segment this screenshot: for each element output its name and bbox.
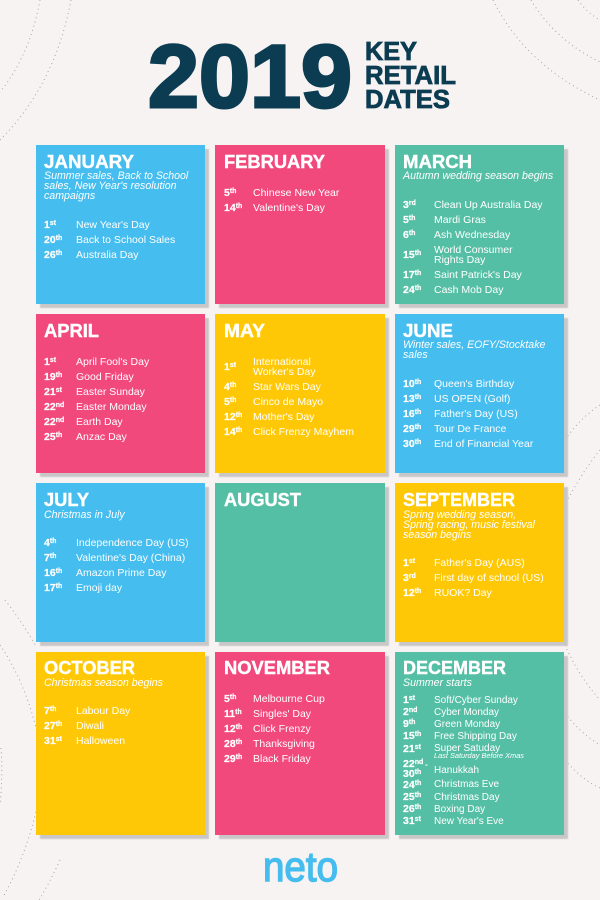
dates: February [224, 187, 340, 214]
panel: August [215, 483, 389, 646]
dates: April: Anzac Day [76, 431, 128, 443]
dates: July: th [50, 553, 56, 560]
panel: June [395, 314, 568, 477]
dates: December: 15 [403, 730, 415, 742]
subtitle: June: sales [403, 349, 428, 361]
dates: November: 5 [224, 693, 230, 705]
dates: June: 13 [403, 393, 415, 405]
dates: January: 1 [44, 219, 50, 231]
dates: January: th [56, 235, 62, 242]
dates: May: th [230, 382, 236, 389]
dates: May: 5 [224, 396, 230, 408]
dates: November: 28 [224, 738, 236, 750]
subtitle: September: season begins [403, 529, 472, 541]
dates: November: Thanksgiving [253, 738, 315, 750]
dates: December: th [415, 731, 421, 738]
dates: September: 12 [403, 587, 415, 599]
panel: December [395, 652, 568, 839]
dates: October: 31 [44, 735, 56, 747]
dates: June: 29 [403, 423, 415, 435]
dates: September: 3 [403, 572, 409, 584]
dates: October: th [56, 721, 62, 728]
dates: December: Soft/Cyber Sunday [434, 695, 518, 706]
dates: May: th [230, 397, 236, 404]
subtitle: January: Summer sales, Back to School [44, 170, 189, 182]
dates: January: 20 [44, 234, 56, 246]
dates: April: April Fool's Day [76, 356, 150, 368]
dates: October: th [50, 706, 56, 713]
subtitle: July: Christmas in July [44, 509, 125, 521]
dates: February: 14 [224, 202, 236, 214]
dates: May: 12 [224, 411, 236, 423]
dates: March: 5 [403, 214, 409, 226]
dates: December: Super Satuday [434, 743, 500, 754]
dates: March: th [409, 230, 415, 237]
dates: May: st [230, 362, 237, 369]
dates: July: th [50, 538, 56, 545]
dates: June: th [415, 409, 421, 416]
dates: July: 16 [44, 567, 56, 579]
subtitle: January: campaigns [44, 190, 96, 202]
panel: April [36, 314, 209, 477]
dates: June: th [415, 424, 421, 431]
dates: January: th [56, 250, 62, 257]
dates: February: th [230, 188, 236, 195]
dates: October: st [56, 736, 63, 743]
dates: December: th [415, 769, 421, 776]
dates: December: - [423, 762, 428, 769]
dates: December: 24 [403, 779, 415, 791]
title words: KEY [365, 38, 417, 66]
dates: December: Christmas Day [434, 792, 500, 803]
dates: July: 7 [44, 552, 50, 564]
dates: December: Boxing Day [434, 804, 485, 815]
subtitle: June: Winter sales, EOFY/Stocktake [403, 339, 545, 351]
subtitle: September: Spring racing, music festival [403, 519, 536, 531]
heading: June: JUNE [403, 320, 453, 341]
dates: March: Mardi Gras [434, 214, 486, 226]
heading: February: FEBRUARY [224, 151, 326, 172]
dates: December: 22 [403, 758, 415, 770]
dates: November: Singles' Day [253, 708, 312, 720]
dates: April: th [56, 372, 62, 379]
dates: June: Queen's Birthday [434, 378, 515, 390]
dates: November: 12 [224, 723, 236, 735]
dates: November: th [235, 709, 242, 716]
dates: March: Cash Mob Day [434, 284, 504, 296]
dates: December: Christmas Eve [434, 779, 499, 790]
dates: December: 1 [403, 694, 409, 706]
dates: December: 31 [403, 815, 415, 827]
dates: March: Clean Up Australia Day [434, 199, 543, 211]
dates: December: Green Monday [434, 719, 500, 730]
dates: January: Back to School Sales [76, 234, 175, 246]
panel: February [215, 145, 389, 308]
dates: November: th [230, 694, 236, 701]
dates: February: Valentine's Day [253, 202, 326, 214]
dates: May: th [236, 412, 242, 419]
dates: April: Earth Day [76, 416, 123, 428]
title words: RETAIL [365, 62, 456, 90]
subtitle: October: Christmas season begins [44, 677, 164, 689]
dates: September: Father's Day (AUS) [434, 557, 525, 569]
dates: March: th [415, 270, 421, 277]
dates: September: rd [409, 573, 416, 580]
dates: April: nd [56, 402, 64, 409]
dates: March: 3 [403, 199, 409, 211]
dates: March: th [415, 285, 421, 292]
dates: December: st [415, 816, 422, 823]
panel: May [215, 314, 389, 477]
dates: October: Diwali [76, 720, 104, 732]
dates: December: Last Saturday Before Xmas [434, 751, 524, 760]
dates: October: Halloween [76, 735, 125, 747]
dates: June: th [415, 439, 421, 446]
heading: September: SEPTEMBER [403, 489, 515, 510]
dates: January: st [50, 220, 57, 227]
dates: January: Australia Day [76, 249, 139, 261]
dates: June: 30 [403, 438, 415, 450]
dates: December [403, 694, 524, 827]
dates: May: Star Wars Day [253, 381, 322, 393]
dates: October [44, 705, 131, 747]
dates: December: 30 [403, 768, 415, 780]
dates: April [44, 356, 150, 443]
dates: November: th [236, 754, 242, 761]
dates: March: th [409, 215, 415, 222]
dates: May: International [253, 356, 311, 368]
subtitle: September: Spring wedding season, [403, 509, 516, 521]
dates: July: Emoji day [76, 582, 123, 594]
dates: April: 1 [44, 356, 50, 368]
dates: January: 26 [44, 249, 56, 261]
subtitle: January: sales, New Year's resolution [44, 180, 177, 192]
heading: October: OCTOBER [44, 657, 135, 678]
subtitle: December: Summer starts [403, 677, 473, 689]
dates: November: Click Frenzy [253, 723, 312, 735]
heading: March: MARCH [403, 151, 472, 172]
dates: March: 24 [403, 284, 415, 296]
dates: June: Father's Day (US) [434, 408, 518, 420]
dates: April: 22 [44, 401, 56, 413]
dates: April: st [56, 387, 63, 394]
title year: 2019 [148, 26, 352, 126]
dates: July: Valentine's Day (China) [76, 552, 185, 564]
title words [365, 38, 456, 114]
heading: April: APRIL [44, 320, 99, 341]
subtitle: March: Autumn wedding season begins [402, 170, 554, 182]
dates: December: nd [415, 759, 423, 766]
dates: November: 11 [224, 708, 235, 720]
dates: December: th [409, 719, 415, 726]
panel: September [395, 483, 568, 646]
heading: January: JANUARY [44, 151, 135, 172]
title words: DATES [365, 86, 450, 114]
dates: June: th [415, 394, 421, 401]
dates: March: Saint Patrick's Day [434, 269, 523, 281]
heading: November: NOVEMBER [224, 657, 330, 678]
dates: December: Cyber Monday [434, 707, 499, 718]
dates: March: th [415, 250, 421, 257]
dates: June: 16 [403, 408, 415, 420]
dates: May: 4 [224, 381, 230, 393]
dates: December: nd [409, 707, 417, 714]
dates: April: nd [56, 417, 64, 424]
subtitle: January [44, 170, 189, 202]
dates: May: 14 [224, 426, 236, 438]
dates: June: 10 [403, 378, 415, 390]
dates: May: th [236, 427, 242, 434]
dates: September: th [415, 588, 421, 595]
dates: April: th [56, 432, 62, 439]
heading: May: MAY [224, 320, 266, 341]
dates: March [403, 199, 543, 296]
dates: January [44, 219, 175, 261]
dates: April: st [50, 357, 57, 364]
dates: July: 17 [44, 582, 56, 594]
dates: May [224, 356, 354, 438]
dates: February: Chinese New Year [253, 187, 340, 199]
dates: April: 21 [44, 386, 56, 398]
dates: May: Click Frenzy Mayhem [253, 426, 354, 438]
dates: December: th [415, 804, 421, 811]
dates: September [403, 557, 544, 599]
dates: September: st [409, 558, 416, 565]
panel: October [36, 652, 209, 839]
dates: April: 25 [44, 431, 56, 443]
dates: June: US OPEN (Golf) [434, 393, 510, 405]
dates: March: rd [409, 200, 416, 207]
dates: March: Ash Wednesday [434, 229, 511, 241]
dates: December: st [409, 695, 416, 702]
dates: May: Mother's Day [253, 411, 315, 423]
dates: November: Black Friday [253, 753, 312, 765]
dates: December: 21 [403, 743, 415, 755]
dates: June [403, 378, 534, 450]
title [148, 26, 456, 126]
dates: March: 17 [403, 269, 415, 281]
dates: April: Easter Monday [76, 401, 147, 413]
dates: November: Melbourne Cup [253, 693, 325, 705]
panel: November [215, 652, 389, 839]
heading: December: DECEMBER [403, 657, 506, 678]
dates: June: th [415, 379, 421, 386]
dates: October: 27 [44, 720, 56, 732]
dates: October: 7 [44, 705, 50, 717]
dates: July: 4 [44, 537, 50, 549]
dates: March: 15 [403, 249, 415, 261]
dates: July: th [56, 583, 62, 590]
dates: September: 1 [403, 557, 409, 569]
dates: June: Tour De France [434, 423, 507, 435]
dates: December: New Year's Eve [434, 816, 504, 827]
dates: April: 19 [44, 371, 56, 383]
dates: September: First day of school (US) [434, 572, 544, 584]
dates: May: 1 [224, 361, 230, 373]
dates: November [224, 693, 325, 765]
dates: May: Cinco de Mayo [253, 396, 323, 408]
dates: December: th [415, 792, 421, 799]
dates: December: 9 [403, 718, 409, 730]
dates: November: th [236, 724, 242, 731]
dates: July: Amazon Prime Day [76, 567, 167, 579]
dates: December: Hanukkah [434, 765, 479, 776]
dates: February: 5 [224, 187, 230, 199]
dates: December: st [415, 744, 422, 751]
dates: December: th [415, 780, 421, 787]
panel: January [36, 145, 209, 308]
dates: May: Worker's Day [253, 366, 316, 378]
dates: July [44, 537, 189, 594]
dates: October: Labour Day [76, 705, 131, 717]
subtitle: September [403, 509, 536, 541]
heading: July: JULY [44, 489, 90, 510]
dates: March: 6 [403, 229, 409, 241]
dates: November: 29 [224, 753, 236, 765]
logo: neto: neto [263, 843, 338, 890]
dates: December: 25 [403, 791, 415, 803]
dates: December: Free Shipping Day [434, 731, 517, 742]
dates: February: th [236, 203, 242, 210]
dates: April: Easter Sunday [76, 386, 146, 398]
heading: August: AUGUST [224, 489, 302, 510]
dates: September: RUOK? Day [434, 587, 493, 599]
dates: November: th [236, 739, 242, 746]
dates: December: 26 [403, 803, 415, 815]
subtitle: June [403, 339, 545, 361]
dates: April: 22 [44, 416, 56, 428]
dates: July: th [56, 568, 62, 575]
dates: June: End of Financial Year [434, 438, 534, 450]
dates: December: 2 [403, 706, 409, 718]
dates: July: Independence Day (US) [76, 537, 189, 549]
panel: July [36, 483, 209, 646]
dates: March: Rights Day [434, 254, 486, 266]
dates: April: Good Friday [76, 371, 135, 383]
panel: March [395, 145, 568, 308]
dates: January: New Year's Day [76, 219, 151, 231]
dates: March: World Consumer [434, 244, 513, 256]
